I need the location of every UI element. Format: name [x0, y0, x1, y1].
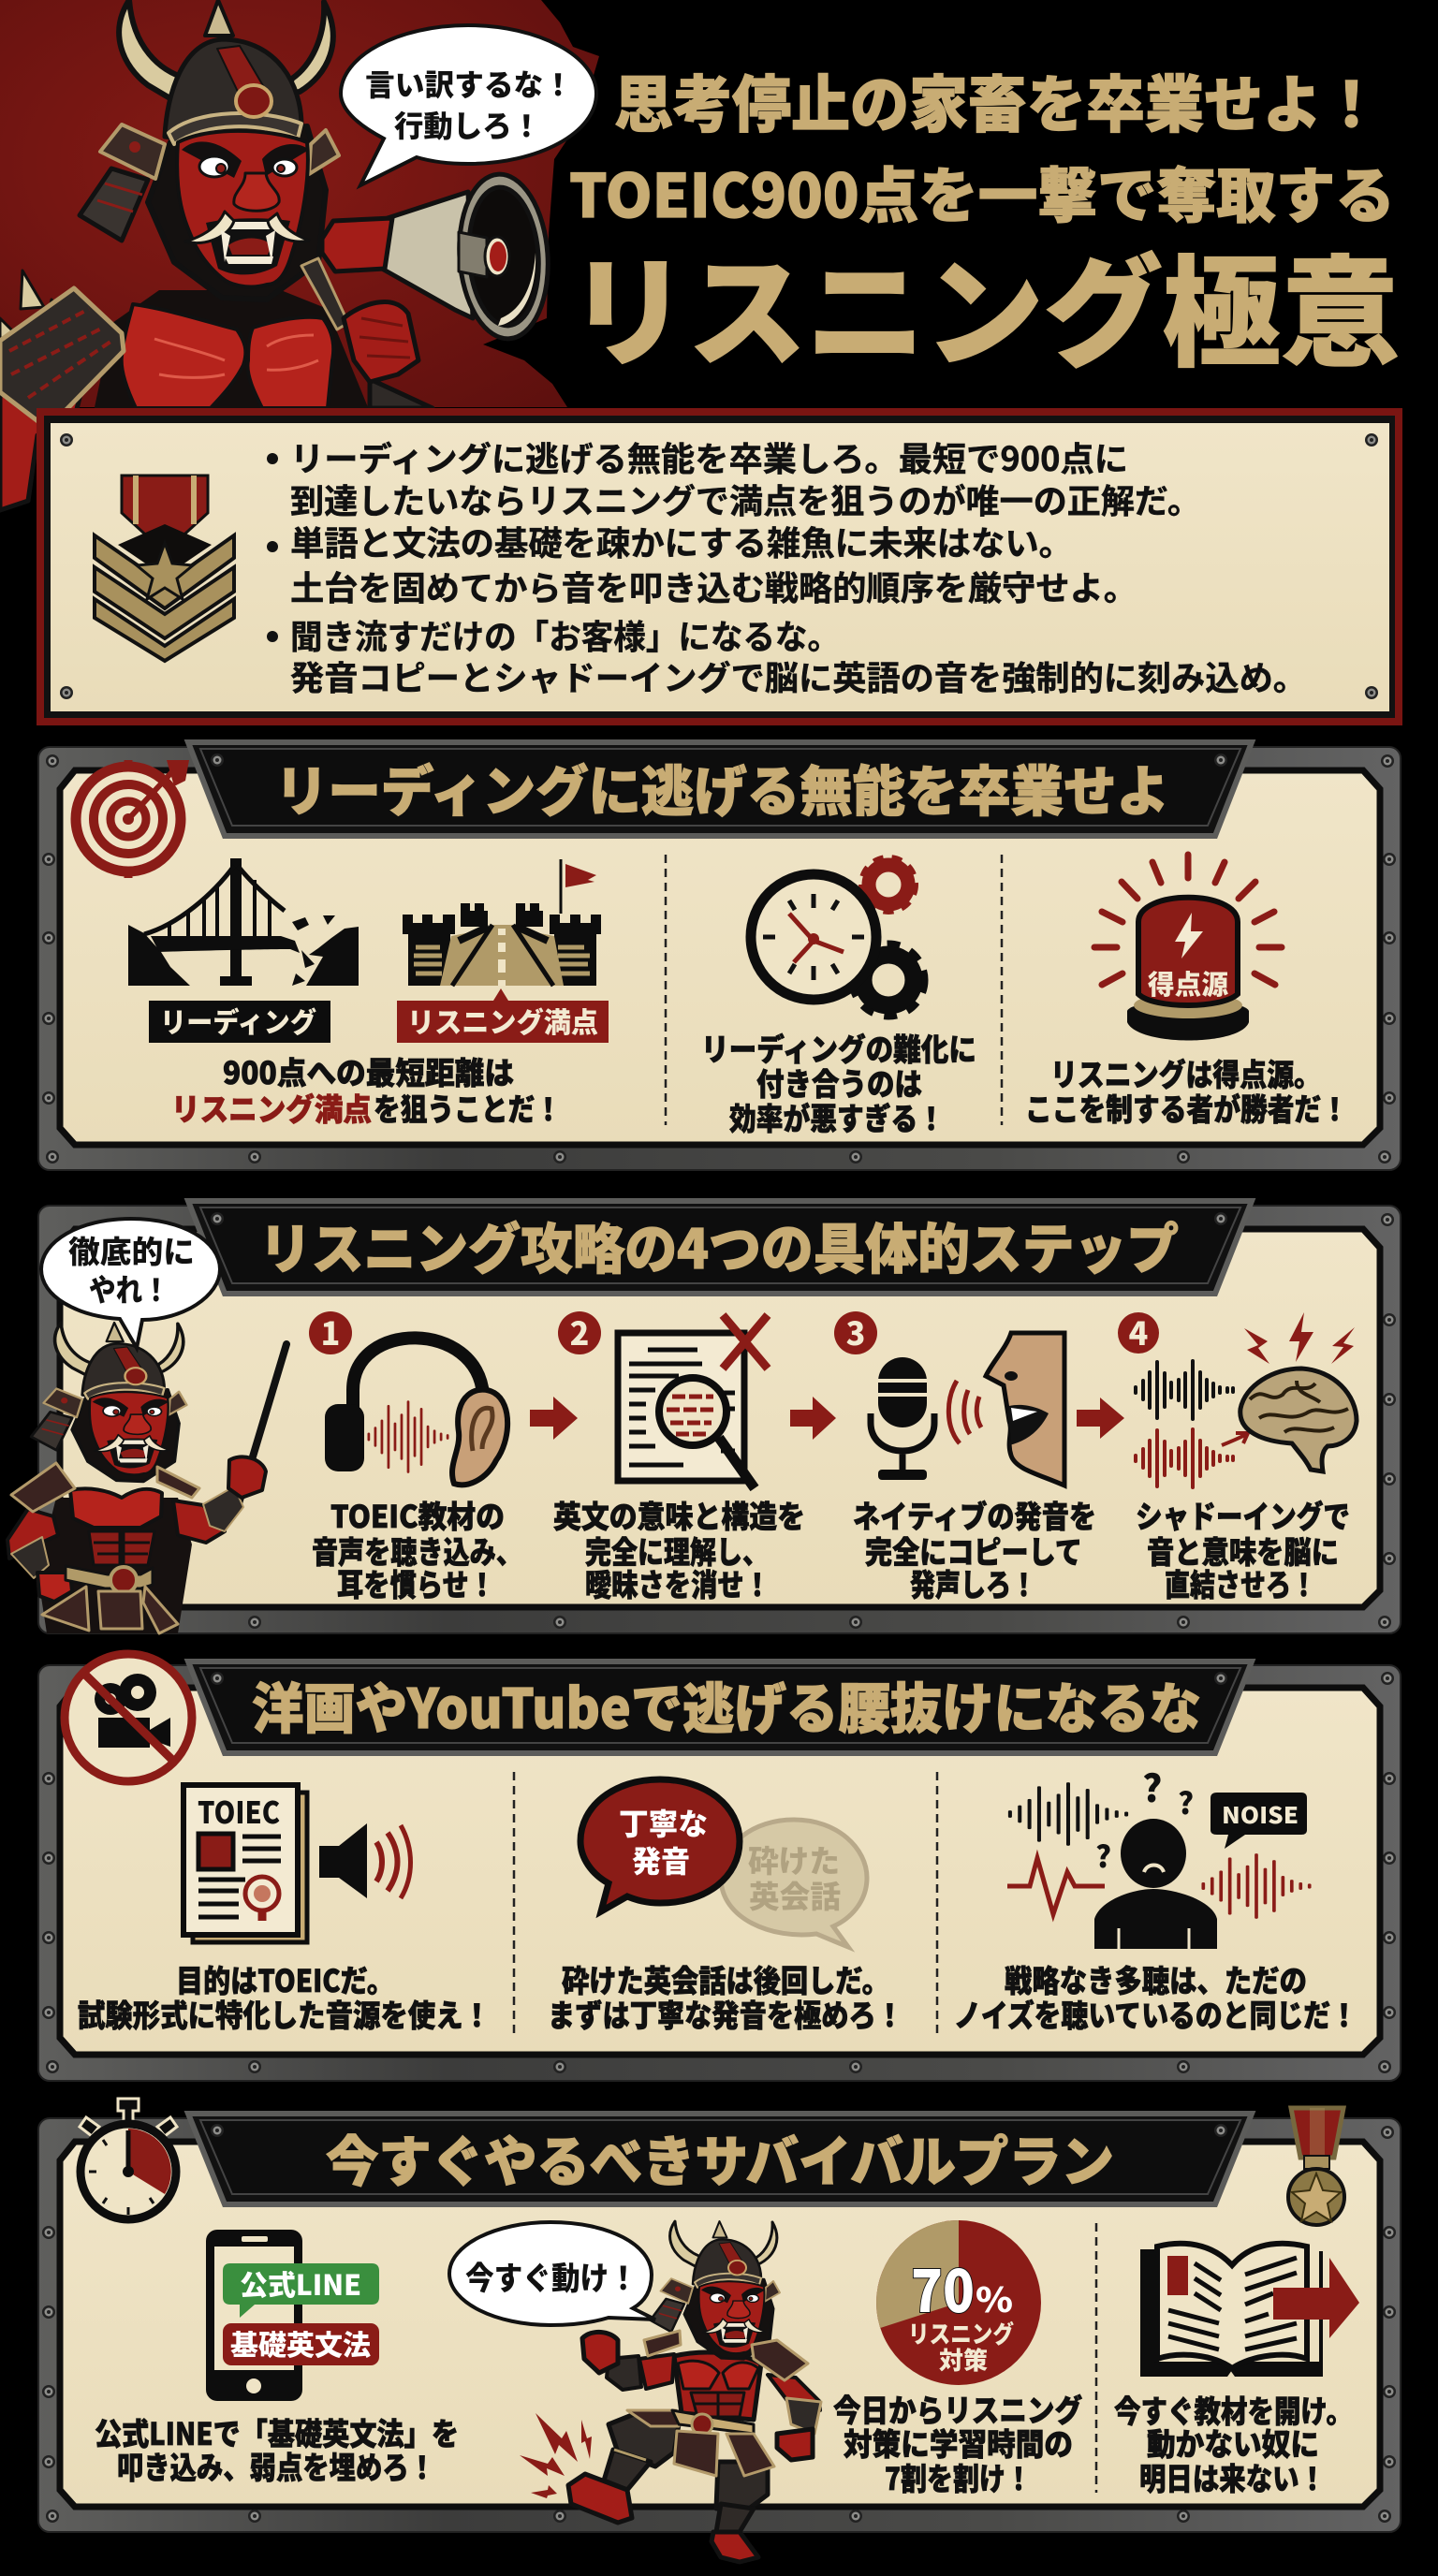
speech bubble: excuses: 行動しろ！: [394, 103, 541, 146]
step 3 badge: [834, 1309, 877, 1354]
bullet list: 聞き流すだけの「お客様」になるな。: [290, 610, 840, 659]
text: section 3 captions: [78, 1956, 1357, 2036]
icon: TOEIC booklet and speaker: TOIEC: [198, 1790, 280, 1833]
text: step captions: シャドーイングで: [1136, 1492, 1350, 1537]
bullet list: 発音コピーとシャドーイングで脳に英語の音を強制的に刻み込め。: [290, 651, 1307, 700]
icon: castle and road: [403, 859, 601, 986]
icon: confused person with noise: NOISE: [1222, 1797, 1299, 1830]
oni silhouette: [37, 1498, 192, 1633]
text: shortest path caption: 900点への最短距離は: [223, 1048, 514, 1093]
text: shortest path caption: を狙うことだ！: [374, 1085, 562, 1130]
text: section 3 captions: ノイズを聴いているのと同じだ！: [954, 1991, 1357, 2036]
title: TOEIC900点を一撃で奪取する: [569, 149, 1395, 235]
oni arms: [639, 2354, 674, 2389]
icon: phone: [206, 2230, 379, 2401]
step 4 badge: [1118, 1309, 1159, 1354]
chart: 70 percent pie: 70: [911, 2245, 975, 2329]
oni side armor: [301, 258, 348, 329]
icon: siren: [1094, 855, 1282, 1041]
megaphone: [322, 171, 553, 342]
text: open book caption: 明日は来ない！: [1139, 2454, 1326, 2499]
text: step captions: 完全にコピーして: [865, 1528, 1082, 1573]
arrow 2: [790, 1397, 836, 1440]
oni legs: [609, 2413, 679, 2466]
text: step captions: 耳を慣らせ！: [337, 1560, 495, 1605]
icon: speaking mouth: [948, 1333, 1064, 1486]
text: 70 percent caption: 今日からリスニング: [833, 2386, 1082, 2431]
text: score source caption: [1025, 1050, 1348, 1130]
panel: section 2 steps: [7, 1201, 1401, 1633]
icon: stopwatch: [80, 2099, 177, 2219]
icon: confused person with noise: ?: [1095, 1834, 1111, 1877]
speech bubble: excuses: 言い訳するな！: [365, 62, 573, 105]
step 3 badge: 3: [846, 1309, 865, 1354]
bullet list: 土台を固めてから音を叩き込む戦略的順序を厳守せよ。: [290, 562, 1137, 610]
text: open book caption: [1114, 2387, 1353, 2499]
title: 思考停止の家畜を卒業せよ！: [614, 55, 1381, 145]
bullet list: [267, 432, 1307, 700]
text: 70 percent caption: [833, 2386, 1082, 2499]
label: listening full score: リスニング満点: [407, 1000, 598, 1041]
icon: clock and gears: [751, 857, 925, 1017]
text: step captions: 直結させろ！: [1165, 1560, 1316, 1605]
icon: waves to brain: [1136, 1312, 1357, 1487]
icon: open book with arrow: [1142, 2244, 1359, 2375]
speech bubble: excuses: [341, 25, 596, 185]
oni head: [650, 2221, 780, 2359]
label: official LINE: 公式LINE: [240, 2262, 361, 2304]
icon: siren: 得点源: [1148, 963, 1228, 1003]
text: step captions: 音と意味を脳に: [1147, 1528, 1339, 1573]
step 2 badge: [558, 1309, 601, 1354]
text: LINE caption: 公式LINEで「基礎英文法」を: [95, 2409, 459, 2454]
icon: confused person with noise: [1007, 1759, 1310, 1949]
bullet list: 単語と文法の基礎を疎かにする雑魚に未来はない。: [290, 517, 1073, 565]
text: section 3 captions: まずは丁寧な発音を極めろ！: [548, 1991, 903, 2036]
oni armor: [627, 2410, 679, 2426]
label: reading: リーディング: [160, 1000, 316, 1041]
icon: polite pronunciation bubble: 発音: [632, 1838, 690, 1881]
heading plate: 今すぐやるべきサバイバルプラン: [326, 2118, 1114, 2197]
marching oni: [520, 2221, 821, 2562]
arrow 3: [1077, 1398, 1124, 1439]
bullet list: 到達したいならリスニングで満点を狙うのが唯一の正解だ。: [290, 475, 1201, 523]
icon: broken bridge: [128, 858, 359, 986]
header red backdrop: [0, 0, 599, 407]
panel: section 4 survival plan: [38, 2099, 1401, 2562]
icon: target: [71, 760, 189, 878]
speech bubble: move now: 今すぐ動け！: [465, 2253, 638, 2299]
oni arms: [173, 1500, 225, 1543]
icon: document with magnifier: [618, 1315, 768, 1488]
oni head: [80, 0, 339, 300]
icon: medal with chevrons: [95, 476, 234, 661]
text: section 3 captions: 目的はTOEICだ。: [176, 1956, 394, 2001]
panel: section 1 reading: [38, 742, 1401, 1170]
icon: polite pronunciation bubble: [580, 1779, 867, 1947]
chart: 70 percent pie: [876, 2220, 1041, 2385]
icon: confused person with noise: ?: [1178, 1780, 1194, 1823]
arrow 1: [530, 1397, 578, 1440]
panel: section 3 no youtube: [38, 1654, 1401, 2081]
text: step captions: 完全に理解し、: [585, 1528, 769, 1573]
text: shortest path caption: リスニング満点: [171, 1085, 372, 1130]
oni with baton: [7, 1323, 286, 1633]
text: step captions: 発声しろ！: [910, 1560, 1036, 1605]
title: リスニング極意: [569, 217, 1400, 390]
step 4 badge: 4: [1129, 1309, 1148, 1354]
heading plate: リーディングに逃げる無能を卒業せよ: [275, 748, 1169, 827]
text: section 3 captions: 砕けた英会話は後回しだ。: [562, 1956, 889, 2001]
oni shoulders: [11, 1463, 75, 1512]
text: section 3 captions: 戦略なき多聴は、ただの: [1005, 1956, 1307, 2001]
heading plate: リスニング攻略の4つの具体的ステップ: [259, 1206, 1179, 1284]
oni skirt: [98, 1591, 142, 1629]
icon: polite pronunciation bubble: 英会話: [749, 1872, 841, 1917]
speech bubble: move now: [449, 2222, 655, 2325]
text: LINE caption: 叩き込み、弱点を埋めろ！: [117, 2443, 435, 2488]
icon: no movie camera: [65, 1654, 192, 1781]
speech bubble: do it thoroughly: やれ！: [89, 1266, 169, 1310]
label: official LINE: [223, 2262, 379, 2318]
title: [569, 55, 1400, 390]
text: difficulty caption: 効率が悪すぎる！: [729, 1094, 945, 1139]
text: section 3 captions: 試験形式に特化した音源を使え！: [78, 1991, 491, 2036]
text: step captions: TOEIC教材の: [330, 1492, 505, 1537]
text: score source caption: ここを制する者が勝者だ！: [1025, 1085, 1348, 1130]
text: step captions: 英文の意味と構造を: [553, 1492, 805, 1537]
bullet list: リーディングに逃げる無能を卒業しろ。最短で900点に: [290, 432, 1128, 481]
icon: microphone: [871, 1357, 934, 1480]
icon: TOEIC booklet and speaker: [183, 1785, 410, 1942]
text: difficulty caption: [701, 1025, 976, 1139]
chart: 70 percent pie: 対策: [939, 2342, 988, 2377]
text: open book caption: 今すぐ教材を開け。: [1114, 2387, 1353, 2432]
text: shortest path caption: [171, 1048, 562, 1130]
text: step captions: ネイティブの発音を: [853, 1492, 1096, 1537]
step 1 badge: [309, 1309, 352, 1354]
text: step captions: [312, 1492, 1350, 1605]
oni head: [31, 1323, 187, 1482]
oni fist: [370, 379, 433, 408]
chart: 70 percent pie: リスニング: [908, 2316, 1014, 2350]
text: 70 percent caption: 対策に学習時間の: [844, 2420, 1073, 2465]
speech bubble: do it thoroughly: 徹底的に: [68, 1227, 195, 1272]
text: 70 percent caption: 7割を割け！: [885, 2454, 1032, 2499]
oni belt: [66, 1566, 153, 1588]
icon: gold medal: [1288, 2108, 1344, 2225]
text: score source caption: リスニングは得点源。: [1050, 1050, 1321, 1095]
icon: confused person with noise: ?: [1142, 1759, 1162, 1813]
oni torso: [70, 1488, 162, 1528]
text: LINE caption: [95, 2409, 459, 2488]
text: step captions: 音声を聴き込み、: [312, 1528, 522, 1573]
speech bubble: do it thoroughly: [41, 1219, 220, 1348]
text: open book caption: 動かない奴に: [1147, 2420, 1319, 2465]
panel: summary: [40, 412, 1399, 722]
text: difficulty caption: 付き合うのは: [756, 1060, 922, 1105]
text: step captions: 曖昧さを消せ！: [585, 1560, 770, 1605]
oni left arm: [0, 374, 84, 510]
baton: [237, 1344, 286, 1510]
heading plate: [188, 2114, 1252, 2204]
icon: headphones and ear: [325, 1338, 507, 1485]
oni torso: [94, 290, 370, 412]
step 2 badge: 2: [570, 1309, 589, 1354]
lightning marks: [520, 2413, 592, 2498]
oni general with megaphone: [0, 0, 553, 510]
label: basic grammar: 基礎英文法: [230, 2322, 371, 2364]
icon: polite pronunciation bubble: 砕けた: [748, 1837, 840, 1881]
text: difficulty caption: リーディングの難化に: [701, 1025, 976, 1070]
oni shoulder armor: [0, 271, 124, 429]
heading plate: 洋画やYouTubeで逃げる腰抜けになるな: [252, 1665, 1201, 1744]
oni torso: [674, 2352, 761, 2420]
icon: polite pronunciation bubble: 丁寧な: [619, 1801, 708, 1844]
step 1 badge: 1: [321, 1309, 340, 1354]
chart: 70 percent pie: %: [976, 2274, 1013, 2322]
